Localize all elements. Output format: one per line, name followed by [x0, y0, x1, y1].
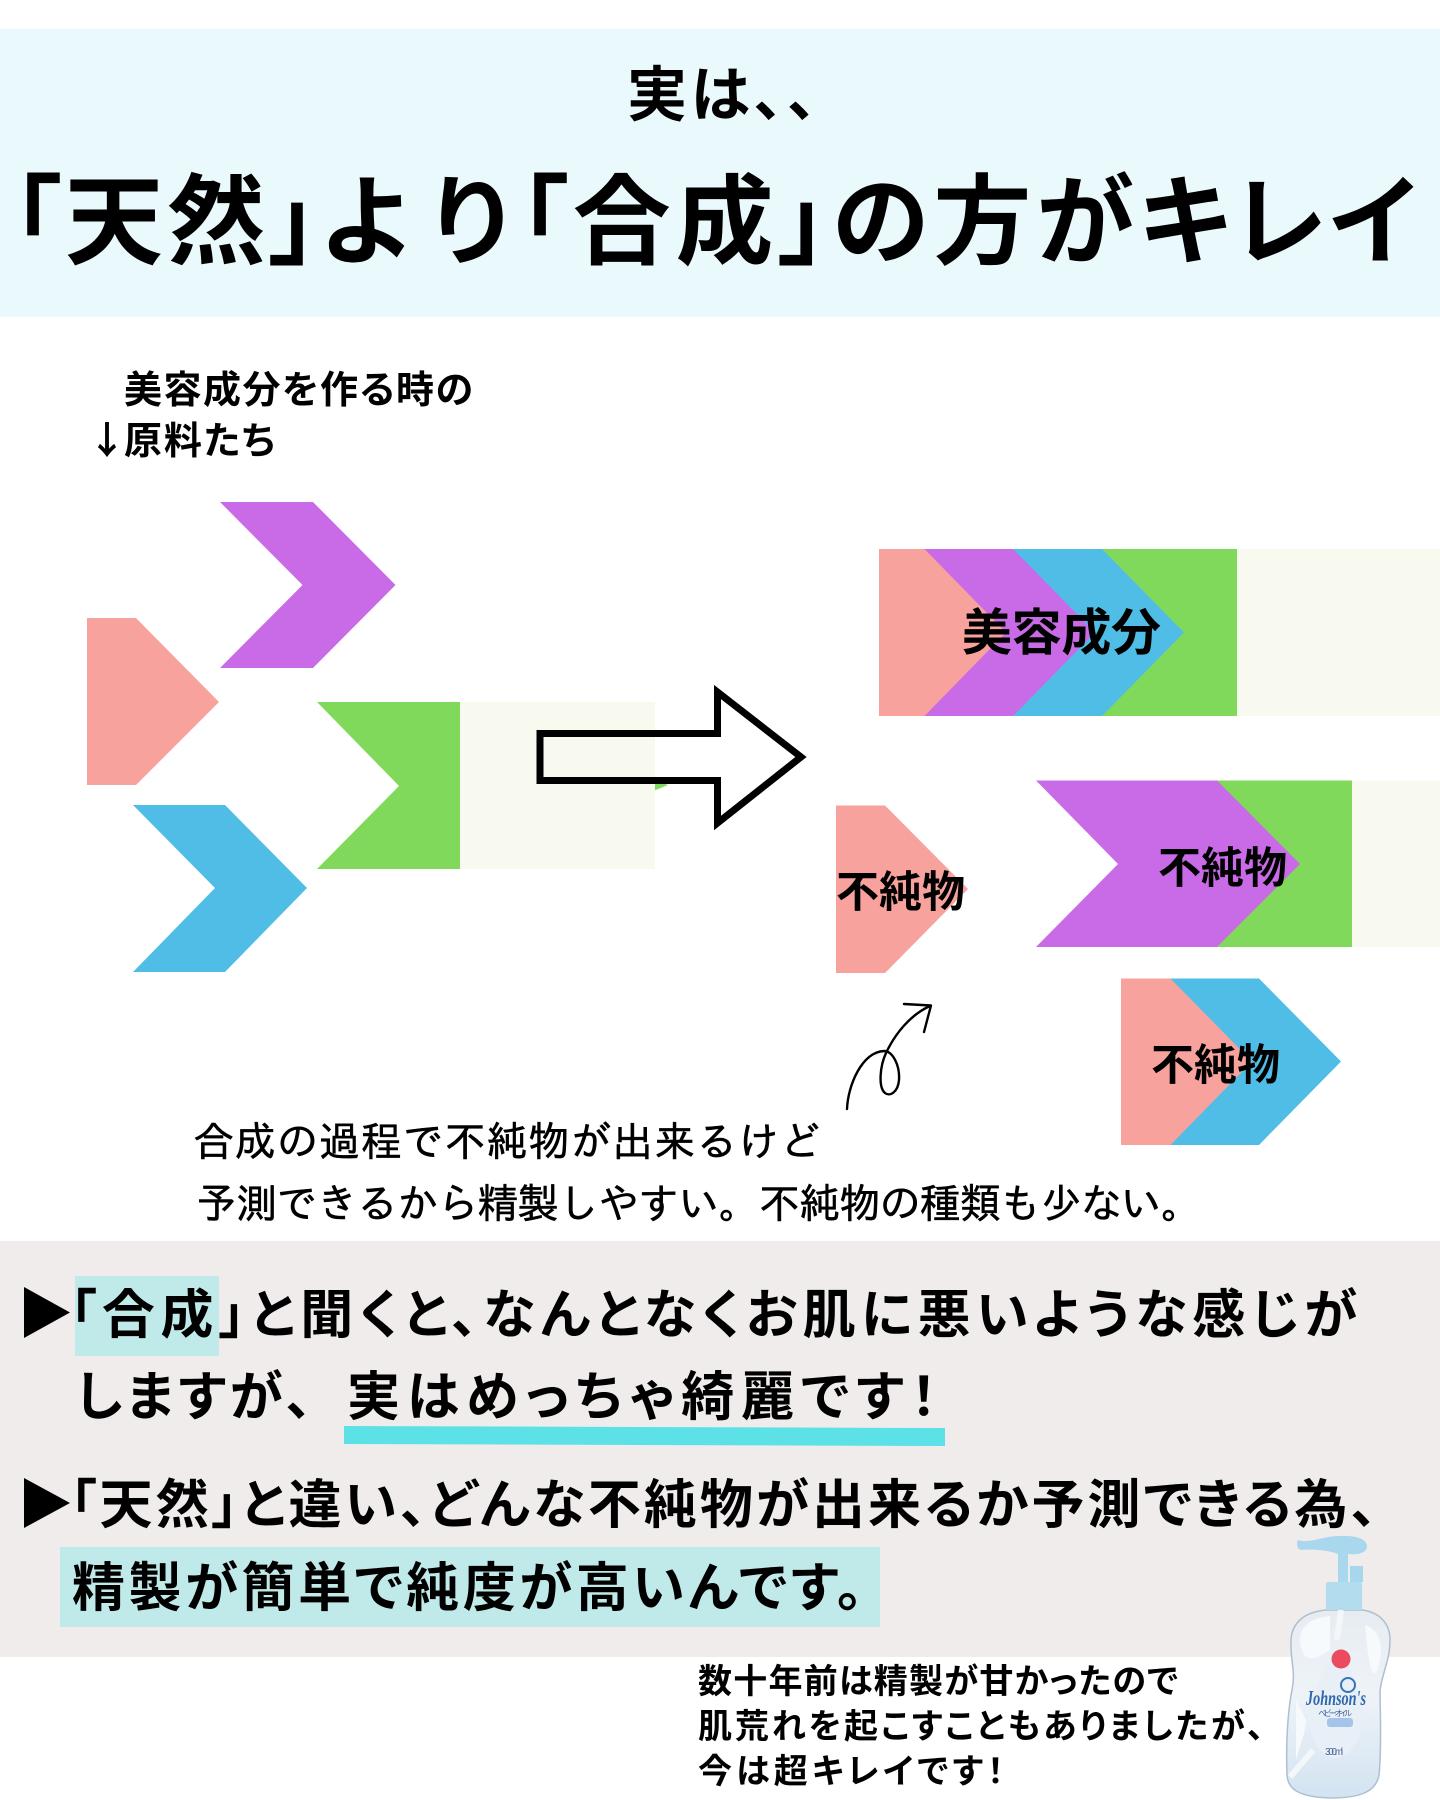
diagram: impurity pink and blue — [1121, 978, 1341, 1145]
arrow: hand-drawn loop arrow — [847, 1004, 931, 1109]
bottle body — [1287, 1610, 1390, 1798]
text block: footnote — [698, 1662, 1264, 1791]
highlight: 合成 — [75, 1276, 219, 1356]
text block: footnote: 肌荒れを起こすこともありましたが、 — [698, 1707, 1264, 1746]
text block: raw materials caption: ↓ — [88, 410, 126, 465]
diagram: raw material shapes — [87, 502, 668, 972]
heading: intro: 実は、、 — [627, 62, 817, 129]
text: point 2 line 1: 「天然」と違い、どんな不純物が出来るか予測できる為、 — [70, 1476, 1377, 1535]
panel: header banner — [0, 29, 1440, 317]
text block: raw materials caption: 美容成分を作る時の — [124, 370, 473, 412]
text block: footnote: 数十年前は精製が甘かったので — [698, 1662, 1178, 1701]
title: 「合成」の方がキレイ — [519, 167, 1417, 277]
arrow: large outline arrow — [540, 692, 801, 823]
text: point 1 line 1: 「合成」と聞くと、なんとなくお肌に悪いような感じが — [70, 1286, 1357, 1345]
text block: raw materials caption: 原料たち — [124, 421, 275, 463]
diagram: impurity pink and blue: 不純物 — [1151, 1042, 1280, 1090]
text block: handwritten note — [193, 1120, 1202, 1223]
icon: oil bottle: ベビーオイル — [1318, 1709, 1352, 1718]
icon: oil bottle: 300ml — [1325, 1747, 1343, 1758]
highlight: point 2 line 2 — [60, 1547, 880, 1627]
text: point 2 line 2: 精製が簡単で純度が高いんです。 — [72, 1559, 863, 1618]
shape: green chevron with pale block — [317, 702, 668, 869]
text: emphasis: 実はめっちゃ綺麗です！ — [347, 1368, 937, 1427]
title: より — [321, 167, 509, 277]
label — [1309, 1638, 1363, 1758]
text block: handwritten note: 予測できるから精製しやすい。不純物の種類も少ない。 — [196, 1182, 1202, 1223]
text: point 1 line 2: しますが、 — [76, 1368, 312, 1427]
underline — [344, 1426, 945, 1446]
diagram: impurity pink — [836, 806, 968, 973]
shape: purple chevron — [220, 502, 396, 668]
shape: pink pentagon — [87, 618, 219, 785]
icon: oil bottle: Johnson's — [1305, 1686, 1366, 1710]
text block: raw materials caption — [88, 370, 473, 465]
icon: bullet triangle 1 — [24, 1287, 70, 1338]
title — [12, 167, 1417, 277]
icon: bullet triangle 2 — [24, 1478, 70, 1528]
diagram: beauty ingredient bar — [879, 549, 1440, 716]
shape: blue chevron — [133, 805, 307, 972]
title: 「天然」 — [12, 167, 318, 277]
diagram: impurity purple and green — [1036, 780, 1440, 947]
text block: handwritten note: 合成の過程で不純物が出来るけど — [193, 1120, 821, 1161]
label: beauty ingredient: 美容成分 — [962, 605, 1161, 661]
pump — [1297, 1536, 1367, 1582]
icon: oil bottle — [1287, 1536, 1390, 1798]
diagram: impurity purple and green: 不純物 — [1158, 845, 1287, 893]
inner tube — [1290, 1610, 1341, 1777]
panel: explanation — [0, 1241, 1440, 1657]
diagram: impurity pink: 不純物 — [836, 869, 965, 917]
text block: footnote: 今は超キレイです！ — [698, 1753, 1004, 1791]
